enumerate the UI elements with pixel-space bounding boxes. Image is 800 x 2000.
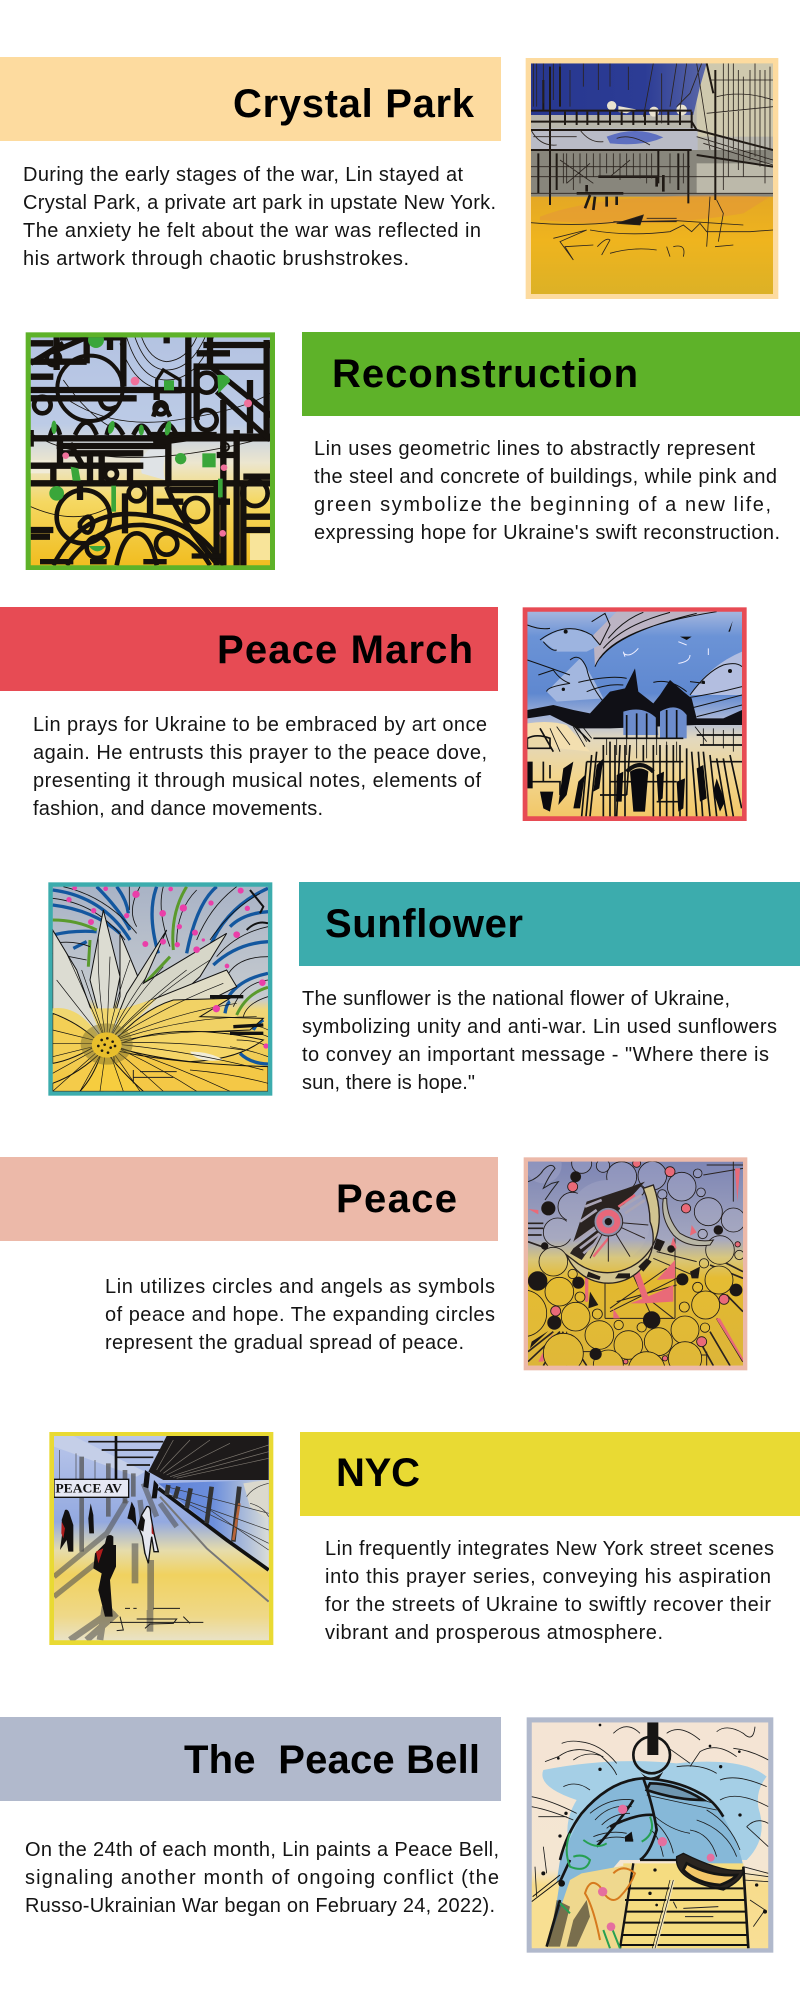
text block: Reconstruction description	[314, 438, 780, 544]
artwork: NYC painting: PEACE AV	[55, 1482, 122, 1496]
artwork: Peace painting	[524, 1157, 748, 1370]
artwork: Sunflower painting	[48, 882, 272, 1096]
text block: Peace March description: again. He entrusts this prayer to the peace dove,	[33, 742, 487, 764]
heading: Peace: Peace	[336, 1177, 457, 1221]
text block: Sunflower description: to convey an important message - "Where there is	[302, 1044, 769, 1066]
text block: Peace March description: Lin prays for Ukraine to be embraced by art once	[33, 714, 487, 736]
panel: Crystal Park	[0, 57, 778, 299]
text block: Crystal Park description: Crystal Park, a private art park in upstate New York.	[23, 192, 496, 214]
text block: Sunflower description: symbolizing unity and anti-war. Lin used sunflowers	[302, 1016, 777, 1038]
text block: NYC description: into this prayer series, conveying his aspiration	[325, 1566, 771, 1588]
text block: Peace description: Lin utilizes circles and angels as symbols	[105, 1276, 495, 1298]
text block: Crystal Park description: his artwork through chaotic brushstrokes.	[23, 248, 409, 270]
panel: The Peace Bell	[0, 1717, 773, 1953]
panel: Peace	[0, 1157, 748, 1370]
text block: Peace March description: fashion, and dance movements.	[33, 798, 323, 820]
text block: Reconstruction description: the steel and concrete of buildings, while pink and	[314, 466, 777, 488]
banner: The Peace Bell	[0, 1717, 501, 1801]
text block: Peace description: of peace and hope. The expanding circles	[105, 1304, 495, 1326]
text block: Reconstruction description: expressing hope for Ukraine's swift reconstruction.	[314, 522, 780, 544]
text block: The Peace Bell description: signaling another month of ongoing conflict (the	[25, 1867, 499, 1889]
banner: Sunflower	[299, 882, 800, 966]
artwork: The Peace Bell painting	[527, 1717, 773, 1953]
banner: Crystal Park	[0, 57, 501, 141]
text block: The Peace Bell description: On the 24th of each month, Lin paints a Peace Bell,	[25, 1839, 499, 1861]
text block: Peace March description: presenting it through musical notes, elements of	[33, 770, 481, 792]
text block: Peace description	[105, 1276, 495, 1354]
banner: NYC	[300, 1432, 800, 1516]
text block: Crystal Park description	[23, 164, 496, 270]
text block: The Peace Bell description	[25, 1839, 499, 1917]
heading: Reconstruction: Reconstruction	[332, 352, 638, 396]
text block: Peace description: represent the gradual spread of peace.	[105, 1332, 464, 1354]
artwork: NYC painting	[49, 1432, 273, 1645]
panel: NYC	[49, 1432, 800, 1645]
heading: Crystal Park: Crystal Park	[233, 82, 475, 126]
text block: NYC description: Lin frequently integrates New York street scenes	[325, 1538, 774, 1560]
text block: Crystal Park description: During the early stages of the war, Lin stayed at	[23, 164, 463, 186]
artwork: Peace March painting	[523, 607, 747, 821]
heading: Sunflower: Sunflower	[325, 902, 523, 946]
text block: Sunflower description	[302, 988, 777, 1094]
artwork: Reconstruction painting	[26, 332, 277, 570]
text block: Reconstruction description: green symbolize the beginning of a new life,	[314, 494, 771, 516]
panel: Sunflower	[48, 882, 800, 1096]
text block: NYC description: for the streets of Ukraine to swiftly recover their	[325, 1594, 771, 1616]
text block: Crystal Park description: The anxiety he felt about the war was reflected in	[23, 220, 481, 242]
text block: Peace March description	[33, 714, 487, 820]
banner: Peace March	[0, 607, 498, 691]
banner: Peace	[0, 1157, 498, 1241]
text block: The Peace Bell description: Russo-Ukrainian War began on February 24, 2022).	[25, 1895, 495, 1917]
text block: Sunflower description: The sunflower is the national flower of Ukraine,	[302, 988, 730, 1010]
heading: Peace March: Peace March	[217, 628, 473, 672]
panel: Peace March	[0, 607, 747, 821]
text block: NYC description: vibrant and prosperous atmosphere.	[325, 1622, 663, 1644]
panel: Reconstruction	[26, 332, 800, 570]
heading: The Peace Bell: The Peace Bell	[184, 1738, 480, 1782]
artwork: Crystal Park painting	[526, 58, 778, 299]
heading: NYC: NYC	[336, 1451, 420, 1495]
text block: NYC description	[325, 1538, 774, 1644]
banner: Reconstruction	[302, 332, 800, 416]
text block: Sunflower description: sun, there is hope."	[302, 1072, 475, 1094]
text block: Reconstruction description: Lin uses geometric lines to abstractly represent	[314, 438, 755, 460]
